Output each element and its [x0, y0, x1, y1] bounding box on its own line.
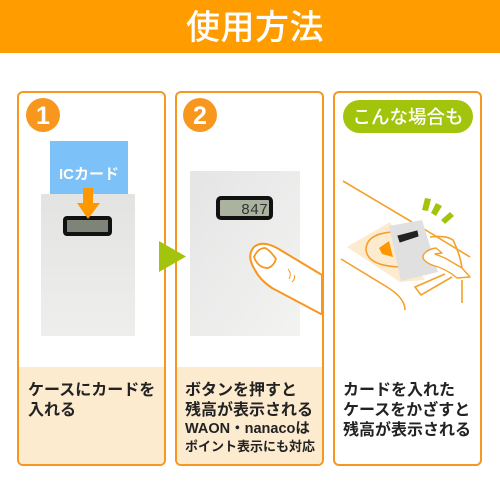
other case text — [343, 382, 471, 439]
other case text: ケースをかざすと — [343, 402, 470, 419]
badge 2: 2 — [193, 102, 207, 130]
case in step 2 — [190, 171, 300, 336]
badge 1 — [26, 98, 60, 132]
other case text: カードを入れた — [343, 382, 455, 399]
step 2 note: ポイント表示にも対応 — [185, 439, 315, 454]
green arrow — [159, 241, 186, 272]
other case text: 残高が表示される — [343, 422, 471, 439]
panel: step 1 — [17, 91, 166, 466]
header band — [0, 0, 500, 53]
orange down arrow — [77, 188, 100, 219]
title: 使用方法 — [186, 9, 324, 47]
step 2 caption background — [177, 367, 322, 464]
step 1 caption background — [19, 367, 164, 464]
step 2 text: ボタンを押すと — [185, 382, 297, 399]
badge: other case: こんな場合も — [352, 106, 464, 128]
step 2 note — [185, 421, 315, 454]
step 1 text: 入れる — [28, 402, 76, 419]
panel: step 2 — [175, 91, 324, 466]
illustration: holding case over reader — [341, 181, 470, 310]
step 2 text — [185, 381, 315, 454]
step 2 note: WAON・nanacoは — [185, 421, 310, 437]
step 2 text: 残高が表示される — [185, 402, 313, 419]
case in step 1 — [41, 194, 135, 336]
badge 1: 1 — [36, 102, 50, 130]
IC card — [50, 141, 128, 195]
panel: other case — [333, 91, 482, 466]
step 1 text — [28, 382, 155, 419]
finger — [250, 244, 322, 314]
step 1 text: ケースにカードを — [28, 382, 155, 399]
case in step 2: 847 — [241, 202, 268, 219]
IC card: ICカード — [59, 166, 119, 183]
badge: other case — [343, 100, 473, 133]
badge 2 — [183, 98, 217, 132]
